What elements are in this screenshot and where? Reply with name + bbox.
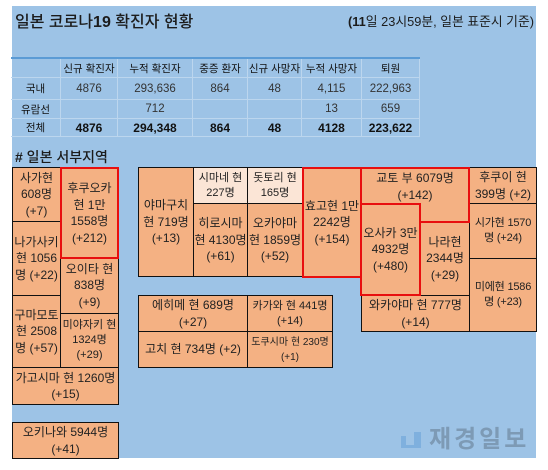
icon: logo mark	[401, 432, 421, 448]
region: Mie: 명 (+23)	[484, 296, 522, 308]
region: Oita: 838명	[74, 278, 105, 292]
region: Oita	[60, 257, 119, 314]
region: Osaka highlighted	[360, 203, 421, 296]
region: Kumamoto: 명 (+57)	[15, 341, 58, 355]
region: Nara: (+29)	[431, 268, 459, 282]
region: Kyoto highlighted: (+142)	[397, 188, 433, 202]
region: Tottori: 돗토리 현	[253, 172, 297, 184]
region: Shiga	[469, 203, 537, 259]
region: Fukui	[469, 167, 537, 204]
summary table	[11, 57, 420, 137]
region: Tokushima	[247, 331, 333, 368]
region: Kumamoto	[12, 295, 61, 368]
region: Tottori	[247, 167, 303, 204]
summary table: 신규 사망자	[249, 62, 300, 74]
region: Fukuoka highlighted: 후쿠오카	[67, 181, 112, 195]
region: Kochi	[138, 331, 248, 368]
region: Kagoshima: 가고시마 현 1260명	[16, 370, 115, 384]
region: Mie	[469, 258, 537, 332]
region: Tottori: 165명	[261, 186, 289, 198]
region: Ehime	[138, 295, 248, 332]
region: Hiroshima: 현 4130명	[194, 233, 247, 247]
watermark text: 재경일보	[429, 426, 529, 453]
summary table: 신규 확진자	[63, 62, 115, 74]
region: Miyazaki	[60, 313, 119, 368]
region: Nagasaki: 명 (+22)	[15, 268, 58, 282]
region: Shiga: 명 (+24)	[484, 232, 522, 244]
region: Kagawa: (+14)	[277, 314, 303, 326]
region: Miyazaki: 1324명	[72, 334, 107, 346]
region: Nagasaki	[12, 221, 61, 296]
region: Nara	[420, 221, 470, 296]
region: Kochi: 고치 현 734명 (+2)	[145, 342, 241, 356]
summary table: 712	[145, 103, 165, 115]
region: Osaka highlighted: 4932명	[372, 242, 409, 256]
summary table: 4876	[76, 82, 102, 94]
region: Miyazaki: 미야자키 현	[63, 319, 116, 331]
region: Wakayama: (+14)	[401, 314, 430, 328]
summary table: 48	[268, 120, 281, 134]
summary table: 294,348	[133, 120, 177, 134]
region: Yamaguchi: 야마구치	[144, 198, 188, 212]
timestamp note: (11일 23시59분, 일본 표준시 기준)	[348, 14, 534, 29]
region: Kagawa	[247, 295, 333, 332]
region: Nara: 2344명	[426, 251, 464, 265]
region: Okayama: 오카야마	[253, 216, 297, 230]
region: Oita: (+9)	[79, 295, 100, 309]
section heading: # 일본 서부지역	[15, 149, 108, 165]
region: Miyazaki: (+29)	[76, 349, 102, 361]
summary table: 222,963	[370, 82, 411, 94]
summary table: 유람선	[21, 104, 50, 116]
region: Hyogo highlighted	[302, 167, 362, 278]
region: Kagoshima: (+15)	[51, 387, 80, 401]
region: Hyogo highlighted: (+154)	[314, 232, 350, 246]
region: Shiga: 시가현 1570	[475, 217, 531, 229]
region: Fukuoka highlighted: (+212)	[72, 230, 107, 244]
summary table: 누적 사망자	[306, 62, 357, 74]
summary table: 659	[381, 103, 400, 115]
region: Shimane: 시마네 현	[199, 172, 242, 184]
region: Okayama: (+52)	[261, 249, 289, 263]
region: Hiroshima	[193, 203, 248, 277]
region: Wakayama: 와카야마 현 777명	[369, 298, 462, 312]
region: Yamaguchi: 현 719명	[143, 215, 189, 229]
region: Okayama: 현 1859명	[249, 233, 301, 247]
region: Fukui: 399명 (+2)	[475, 186, 531, 200]
region: Kumamoto: 현 2508	[16, 324, 57, 338]
region: Hyogo highlighted: 효고현 1만	[305, 199, 359, 213]
region: Yamaguchi	[138, 167, 194, 277]
summary table: 4128	[318, 120, 345, 134]
region: Hyogo highlighted: 2242명	[313, 215, 351, 229]
region: Okayama	[247, 203, 303, 277]
region: Yamaguchi: (+13)	[152, 231, 180, 245]
summary table: 223,622	[369, 120, 412, 134]
region: Kagoshima	[12, 367, 119, 405]
region: Hiroshima: 히로시마	[198, 216, 243, 230]
region: Wakayama	[361, 295, 470, 332]
region: Nagasaki: 현 1056	[16, 251, 57, 265]
watermark logo	[401, 426, 529, 453]
region: Mie: 미에현 1586	[475, 281, 531, 293]
region: Okinawa: (+41)	[51, 442, 80, 456]
region: Tokushima: 도쿠시마 현 230명	[251, 336, 329, 348]
summary table: 전체	[26, 122, 45, 134]
summary table: 4876	[76, 120, 102, 134]
region: Tokushima: (+1)	[281, 352, 299, 362]
summary table: 293,636	[134, 82, 176, 94]
region: Saga	[12, 167, 61, 222]
summary table: 국내	[26, 83, 45, 95]
summary table: 864	[210, 120, 230, 134]
region: Shimane	[193, 167, 248, 204]
region: Oita: 오이타 현	[66, 262, 113, 276]
region: Kumamoto: 구마모토	[14, 308, 59, 322]
region: Fukuoka highlighted	[60, 167, 119, 259]
region: Nara: 나라현	[428, 235, 462, 249]
region: Okinawa: 오키나와 5944명	[23, 425, 108, 439]
region: Saga: (+7)	[26, 204, 47, 218]
region: Saga: 사가현	[20, 171, 53, 185]
region: Kyoto highlighted	[360, 167, 470, 223]
region: Shimane: 227명	[206, 186, 235, 198]
region: Nagasaki: 나가사키	[14, 235, 59, 249]
summary table: 13	[325, 103, 338, 115]
region: Fukuoka highlighted: 현 1만	[73, 198, 106, 212]
region: Ehime: (+27)	[179, 314, 207, 328]
summary table: 퇴원	[381, 62, 400, 74]
summary table: 4,115	[318, 82, 345, 94]
region: Okinawa	[12, 422, 119, 459]
region: Osaka highlighted: (+480)	[373, 259, 408, 273]
region: Fukui: 후쿠이 현	[479, 170, 527, 184]
region: Saga: 608명	[21, 187, 52, 201]
region: Fukuoka highlighted: 1558명	[71, 214, 108, 228]
summary table: 48	[268, 82, 281, 94]
summary table: 중증 환자	[199, 62, 241, 74]
title: 일본 코로나19 확진자 현황	[15, 14, 193, 31]
region: Ehime: 에히메 현 689명	[152, 298, 234, 312]
region: Osaka highlighted: 오사카 3만	[363, 226, 418, 240]
summary table: 누적 확진자	[129, 62, 181, 74]
region: Hiroshima: (+61)	[206, 249, 235, 263]
region: Kagawa: 카가와 현 441명	[252, 300, 328, 312]
summary table: 864	[210, 82, 230, 94]
region: Kyoto highlighted: 교토 부 6079명	[376, 171, 454, 185]
